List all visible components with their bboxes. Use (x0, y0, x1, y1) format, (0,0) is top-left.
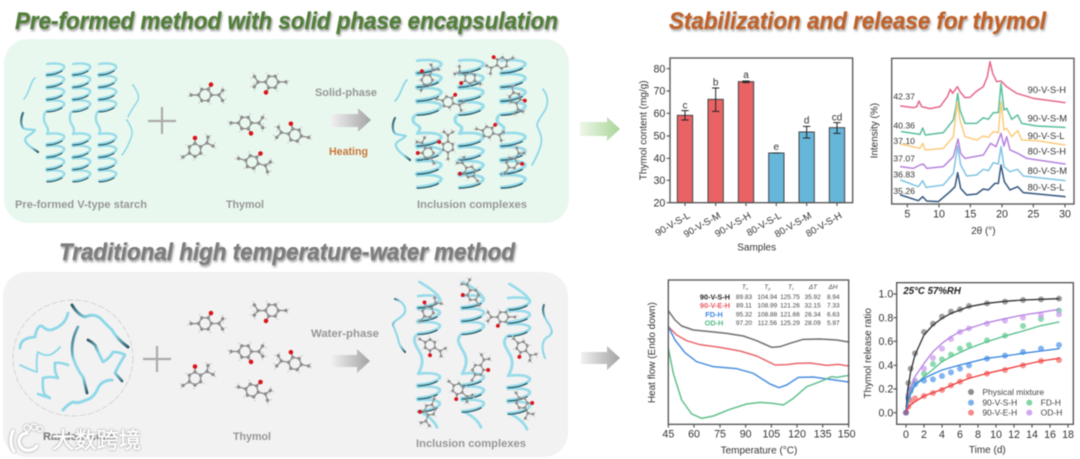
thermal parameter table: T (742, 284, 746, 291)
panel: pre-formed method (4, 39, 569, 223)
x tick labels (904, 209, 1071, 221)
heat flow curves (668, 311, 849, 418)
crystallinity values: 36.83 (893, 169, 915, 179)
thermal parameter table: 121.66 (780, 312, 800, 319)
x tick labels: 90-V-S-H (713, 210, 753, 240)
x tick labels: 150 (838, 429, 856, 441)
y tick labels: 20 (653, 197, 665, 209)
legend: FD-H (1041, 398, 1061, 408)
watermark (11, 424, 141, 453)
significance letters: b (713, 77, 719, 88)
crystallinity values: 37.10 (893, 136, 915, 146)
sample labels (1028, 85, 1067, 192)
arrow: gray to results (581, 346, 620, 370)
thermal parameter table: o (746, 286, 749, 291)
DSC chart (647, 280, 856, 457)
x tick labels: 0 (903, 429, 909, 441)
x tick labels (654, 210, 844, 240)
bar chart: thymol content (638, 58, 853, 253)
y tick labels: 0.2 (879, 384, 893, 396)
thermal parameter table: p (767, 286, 771, 291)
y tick labels: 0.8 (879, 312, 893, 324)
title: traditional method: Traditional high temperature-water method (59, 239, 516, 266)
x tick labels: 8 (975, 429, 981, 441)
thermal parameter table: T (764, 284, 768, 291)
error bars (681, 81, 841, 153)
label: thymol: Thymol (226, 199, 264, 211)
significance letters: a (743, 70, 749, 81)
significance letters (682, 70, 842, 153)
x tick labels (662, 429, 856, 441)
label: water-phase: Water-phase (311, 328, 379, 340)
x axis title: Samples (737, 242, 776, 253)
thermal parameter table: 5.97 (827, 320, 840, 327)
significance letters: c (682, 101, 687, 112)
thymol molecules (180, 63, 312, 184)
significance letters: e (774, 142, 780, 153)
thermal parameter table: OD-H (705, 318, 723, 327)
sample labels: 90-V-S-L (1028, 131, 1064, 141)
y tick labels: 60 (653, 108, 665, 120)
y axis title: Thymol release ratio (863, 308, 874, 399)
y tick labels: 0.0 (879, 407, 893, 419)
x tick labels: 30 (1059, 209, 1071, 221)
fit curves (906, 299, 1059, 413)
thermal parameter table: 112.56 (758, 320, 777, 327)
crystallinity values: 42.37 (893, 92, 915, 102)
x tick labels: 90-V-S-L (654, 210, 693, 239)
label: pre-formed V-type starch: Pre-formed V-type starch (15, 199, 147, 211)
x tick labels: 5 (904, 209, 910, 221)
XRD curves (901, 62, 1065, 202)
x tick labels: 60 (688, 429, 700, 441)
x tick labels: 14 (1026, 429, 1038, 441)
thermal parameter table: FD-H (705, 310, 723, 319)
thermal parameter table: 32.15 (805, 303, 821, 310)
axes frame (892, 58, 1074, 204)
legend: 90-V-S-H (982, 398, 1017, 408)
plus sign (148, 107, 176, 134)
y tick labels: 40 (653, 153, 665, 165)
y axis title: Intensity (%) (870, 103, 881, 158)
random coils circle (13, 300, 133, 416)
thermal parameter table: 26.34 (805, 312, 821, 319)
x axis title: 2θ (°) (971, 226, 996, 237)
thermal parameter table: 108.88 (757, 312, 778, 319)
label: solid-phase: Solid-phase (315, 87, 377, 99)
significance letters: d (804, 116, 809, 127)
x tick labels: 4 (939, 429, 945, 441)
x tick labels: 80-V-S-H (804, 210, 844, 240)
thermal parameter table: 89.11 (736, 303, 752, 310)
thermal parameter table: 90-V-E-H (700, 301, 730, 310)
sample labels: 90-V-S-M (1028, 113, 1067, 123)
title: pre-formed method: Pre-formed method with solid phase encapsulation (15, 8, 558, 35)
arrow: water-phase (331, 349, 370, 373)
inclusion complexes (393, 45, 547, 188)
inclusion complexes (393, 278, 552, 429)
y tick labels: 50 (653, 131, 665, 143)
blue bars (769, 128, 845, 203)
title: stabilization and release: Stabilization and release for thymol (669, 8, 1047, 35)
label: random coils: Random coils (43, 431, 115, 443)
thermal parameter table: 6.63 (827, 312, 840, 319)
thermal parameter table: 108.99 (757, 303, 778, 310)
y tick labels: 0.4 (879, 360, 893, 372)
x tick labels: 80-V-S-L (745, 210, 784, 239)
axes frame (897, 283, 1073, 424)
x tick labels: 45 (662, 429, 674, 441)
label: thymol: Thymol (233, 431, 271, 443)
thermal parameter table: ΔH (827, 284, 838, 291)
sample labels: 80-V-S-M (1028, 166, 1067, 176)
thermal parameter table: 121.26 (780, 303, 800, 310)
x tick labels: 25 (1027, 209, 1039, 221)
x tick labels: 10 (990, 429, 1002, 441)
arrow: solid-phase (331, 108, 371, 132)
legend: Physical mixture (982, 387, 1044, 397)
thermal parameter table: 28.09 (805, 320, 821, 327)
thermal parameter table: ΔT (808, 284, 818, 291)
sample labels: 90-V-S-H (1028, 85, 1066, 95)
thermal parameter table: c (792, 286, 794, 291)
sample labels: 80-V-S-L (1028, 182, 1064, 192)
y tick labels: 30 (653, 175, 665, 187)
pre-formed V-type starch helices (21, 63, 138, 182)
panel: traditional method (3, 272, 568, 457)
legend (968, 387, 1062, 418)
x tick labels: 18 (1062, 429, 1074, 441)
y tick labels (879, 289, 893, 419)
x tick labels: 15 (964, 209, 976, 221)
y axis title: Heat flow (Endo down) (647, 302, 658, 403)
y tick labels (653, 63, 665, 209)
arrow: green to results (580, 117, 620, 141)
x tick labels: 75 (714, 429, 726, 441)
x tick labels: 135 (814, 429, 832, 441)
crystallinity values: 40.36 (893, 120, 915, 130)
axes frame (668, 280, 849, 424)
x tick labels: 16 (1044, 429, 1056, 441)
thermal parameter table: 95.32 (736, 312, 753, 319)
crystallinity values: 37.07 (893, 154, 915, 164)
label: heating: Heating (329, 146, 368, 158)
x tick labels: 6 (957, 429, 963, 441)
condition label: 25°C 57%RH (902, 286, 962, 297)
label: inclusion complexes: Inclusion complexes (417, 199, 527, 211)
thermal parameter table: 97.20 (736, 320, 753, 327)
x tick labels: 105 (762, 429, 780, 441)
sample labels: 80-V-S-H (1028, 147, 1066, 157)
x tick labels: 20 (996, 209, 1008, 221)
legend: 90-V-E-H (982, 408, 1017, 418)
x axis title: Temperature (°C) (721, 446, 797, 457)
x tick labels: 10 (933, 209, 945, 221)
thermal parameter table: 8.94 (827, 294, 840, 301)
legend: OD-H (1041, 408, 1062, 418)
crystallinity values: 35.26 (893, 186, 915, 196)
y tick labels: 80 (653, 63, 665, 75)
XRD chart (870, 58, 1074, 237)
x tick labels (903, 429, 1074, 441)
thermal parameter table: 125.75 (780, 294, 800, 301)
thermal parameter table: 89.83 (736, 294, 753, 301)
y tick labels: 1.0 (879, 289, 893, 301)
y tick labels: 0.6 (879, 336, 893, 348)
x tick labels: 12 (1008, 429, 1020, 441)
thermal parameter table: 125.29 (780, 320, 800, 327)
x tick labels: 90-V-S-M (682, 210, 723, 240)
watermark: 大数跨境 (52, 428, 141, 453)
y axis title: Thymol content (mg/g) (638, 80, 649, 180)
release kinetics chart (863, 283, 1074, 456)
thermal parameter table: 90-V-S-H (700, 292, 730, 301)
y tick labels: 70 (653, 86, 665, 98)
thermal parameter table: 7.33 (827, 303, 840, 310)
x tick labels: 90 (740, 429, 752, 441)
crystallinity values (893, 92, 915, 196)
x tick labels: 80-V-S-M (773, 210, 814, 240)
x tick labels: 2 (921, 429, 927, 441)
thymol molecules (180, 292, 312, 412)
plus sign (143, 346, 171, 372)
significance letters: cd (832, 112, 842, 123)
thermal parameter table: 35.92 (805, 294, 821, 301)
data points (906, 299, 1059, 413)
thermal parameter table (700, 284, 840, 327)
axes frame (670, 58, 853, 203)
thermal parameter table: 104.94 (757, 294, 778, 301)
label: inclusion complexes: Inclusion complexes (416, 438, 526, 450)
x tick labels: 120 (788, 429, 806, 441)
thermal parameter table: T (788, 284, 792, 291)
red bars (677, 82, 754, 203)
x axis title: Time (d) (969, 445, 1006, 456)
